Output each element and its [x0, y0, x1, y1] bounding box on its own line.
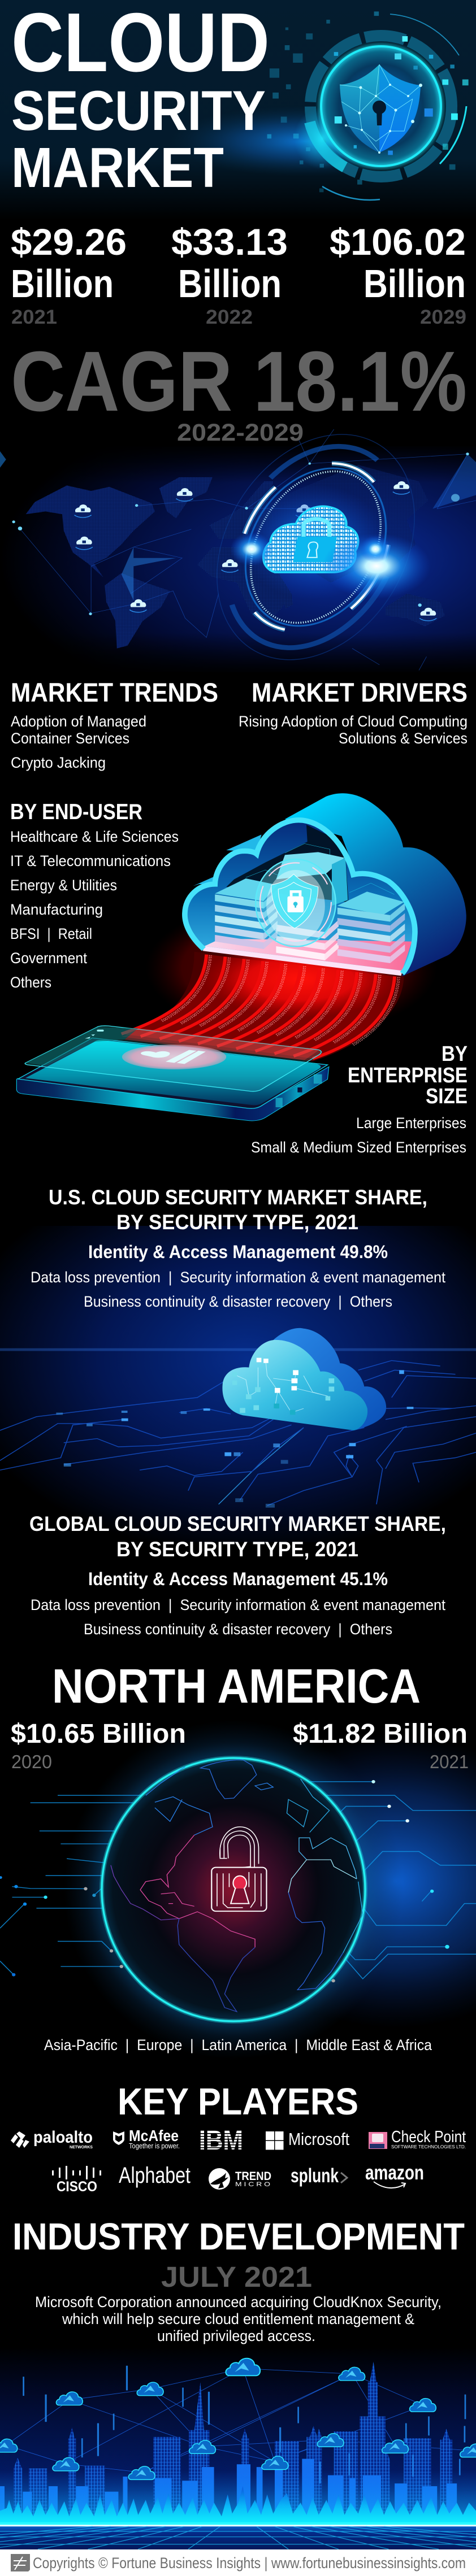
icon: ring around cloud lock	[179, 406, 452, 688]
market value stat 2029: $106.02	[330, 221, 466, 263]
red glow behind data stream: 11010101010110101010011001001100101001	[275, 968, 325, 1036]
icon: circuit padlock	[211, 1827, 266, 1911]
development description: unified privileged access.	[157, 2327, 315, 2344]
end-user list: Manufacturing	[10, 901, 103, 918]
icon: glowing circuit cloud	[222, 1328, 386, 1430]
red glow behind data stream: 11010101010110101010011001001100101001	[257, 966, 306, 1034]
global other segments	[31, 1596, 445, 1638]
logo: Trend Micro	[209, 2168, 271, 2190]
lens flare highlights	[230, 532, 431, 599]
global other segments: Business continuity & disaster recovery | Others	[84, 1621, 392, 1638]
global leading share: Identity & Access Management 45.1%	[88, 1569, 388, 1589]
global market share heading	[29, 1512, 446, 1561]
enterprise size list: Large Enterprises	[356, 1115, 466, 1132]
logo: IBM: IBM	[199, 2126, 243, 2156]
CAGR callout: 2022-2029	[177, 419, 304, 446]
network lines between clouds	[6, 2369, 470, 2473]
market trends list	[11, 713, 146, 771]
region heading: North America: NORTH AMERICA	[52, 1660, 421, 1713]
market value stat 2029	[330, 221, 466, 328]
market trends list: Crypto Jacking	[11, 754, 106, 771]
globe continents outline	[200, 1760, 257, 1799]
market value stat 2021: 2021	[11, 306, 57, 328]
U.S. other segments: Business continuity & disaster recovery | Others	[84, 1293, 392, 1310]
title: MARKET	[11, 136, 224, 199]
icon: Fortune Business Insights logo	[11, 2554, 30, 2571]
end-user list: Energy & Utilities	[10, 877, 117, 894]
by end-user heading: BY END-USER	[10, 800, 142, 824]
logo: Trend Micro: TREND	[235, 2170, 271, 2183]
development description: which will help secure cloud entitlement management &	[62, 2310, 414, 2327]
binary columns	[23, 2366, 466, 2483]
market drivers list: Solutions & Services	[339, 730, 468, 747]
icons: small cloud locks	[75, 504, 92, 517]
globe sphere	[102, 1758, 365, 2021]
illustration: phone with floating screen	[16, 1026, 329, 1121]
logo: Palo Alto	[11, 2128, 93, 2149]
market value stat 2022: $33.13	[171, 221, 288, 263]
circuit lines around globe	[0, 1782, 476, 1981]
illustration: 3D cloud with server stacks	[185, 793, 466, 976]
logo: Check Point	[369, 2128, 466, 2149]
stat: North America 2020: 2020	[11, 1751, 52, 1772]
icon: floating data squares	[267, 11, 469, 192]
panel: digital city skyline	[0, 2347, 476, 2549]
development description: Microsoft Corporation announced acquiring CloudKnox Security,	[35, 2294, 442, 2310]
U.S. leading share: Identity & Access Management 49.8%	[88, 1242, 388, 1262]
red glow behind data stream: 11010101010110101010011001001100101001	[161, 955, 212, 1022]
U.S. market share heading: BY SECURITY TYPE, 2021	[116, 1211, 358, 1234]
clouds on network	[56, 2392, 83, 2405]
floating glass panel	[25, 1026, 321, 1091]
end-user list: Healthcare & Life Sciences	[10, 828, 179, 845]
cloud front outline	[185, 820, 415, 973]
logo: Splunk: splunk	[291, 2165, 339, 2187]
global market share heading: BY SECURITY TYPE, 2021	[116, 1538, 358, 1561]
market trends list: Container Services	[11, 730, 129, 747]
market value stat 2029: 2029	[420, 306, 466, 328]
end-user list: Others	[10, 974, 51, 991]
phone screen	[25, 1040, 321, 1105]
logo: McAfee	[113, 2127, 180, 2150]
footer bar	[0, 2549, 476, 2576]
map: continents	[26, 465, 445, 649]
logo: Cisco: CISCO	[57, 2179, 97, 2195]
market value stat 2022	[171, 221, 288, 328]
logo: Trend Micro: M I C R O	[235, 2181, 271, 2188]
development description	[35, 2294, 442, 2344]
market trends heading: MARKET TRENDS	[11, 677, 218, 707]
stat: North America 2021	[293, 1719, 469, 1772]
key players heading: KEY PLAYERS	[118, 2081, 358, 2123]
market value stat 2022: Billion	[178, 262, 282, 306]
logo: McAfee: McAfee	[129, 2127, 179, 2144]
phone body	[16, 1067, 329, 1121]
by enterprise size heading: SIZE	[426, 1085, 468, 1108]
market value stat 2021: $29.26	[11, 221, 127, 263]
red glow behind data stream: 11010101010110101010011001001100101001	[180, 957, 231, 1025]
cloud extruded back	[285, 793, 466, 976]
market value stat 2021: Billion	[11, 262, 114, 306]
end-user list	[10, 828, 179, 991]
U.S. other segments	[31, 1269, 445, 1310]
stat: North America 2021: 2021	[430, 1751, 469, 1772]
U.S. market share heading: U.S. CLOUD SECURITY MARKET SHARE,	[49, 1186, 427, 1209]
back towers	[14, 2361, 452, 2527]
red glow behind data stream: 11010101010110101010011001001100101001	[332, 974, 382, 1043]
market value stat 2021	[11, 221, 127, 328]
market value stat 2022: 2022	[206, 306, 253, 328]
red glow behind data stream: 11010101010110101010011001001100101001	[199, 959, 250, 1027]
mid towers	[0, 2459, 457, 2526]
icon: shield lock in ring	[256, 859, 336, 947]
icon: cloud with padlock	[240, 484, 386, 599]
red glow behind data stream: 11010101010110101010011001001100101001	[218, 961, 269, 1029]
end-user list: IT & Telecommunications	[10, 852, 171, 869]
pink floor	[205, 939, 412, 971]
stat: North America 2021: $11.82 Billion	[293, 1719, 468, 1749]
red glow behind data stream: 11010101010110101010011001001100101001	[314, 973, 363, 1041]
panel: world map with cloud lock	[0, 406, 476, 688]
panel: circuit cloud backdrop	[0, 1226, 476, 1542]
market trends list: Adoption of Managed	[11, 713, 146, 730]
illustration: data stream from cloud to phone	[121, 928, 429, 1061]
panel: header banner	[0, 0, 476, 220]
other regions: Asia-Pacific | Europe | Latin America | Middle East & Africa	[44, 2037, 432, 2053]
market drivers list	[239, 713, 468, 747]
red glow behind data stream: 11010101010110101010011001001100101001	[352, 977, 400, 1046]
horizontal light streak	[0, 1348, 476, 1351]
red glow behind data stream: 11010101010110101010011001001100101001	[237, 964, 287, 1032]
stat: North America 2020: $10.65 Billion	[11, 1719, 186, 1749]
server stacks	[215, 852, 405, 963]
icon: security shield with rings	[294, 14, 466, 200]
by enterprise size heading	[348, 1042, 468, 1108]
by enterprise size heading: BY	[442, 1042, 468, 1066]
cloud front interior	[185, 820, 415, 973]
title	[11, 0, 270, 199]
enterprise size list	[251, 1115, 466, 1156]
global market share heading: GLOBAL CLOUD SECURITY MARKET SHARE,	[29, 1512, 446, 1535]
perspective grid floor	[0, 2526, 476, 2549]
panel: globe with lock	[0, 1720, 476, 2059]
logo: Palo Alto: NETWORKS	[70, 2146, 93, 2149]
global other segments: Data loss prevention | Security information & event management	[31, 1596, 445, 1613]
U.S. market share heading	[49, 1186, 427, 1234]
development date: JULY 2021	[161, 2261, 312, 2293]
front skyline	[0, 2486, 476, 2526]
logo: Palo Alto: paloalto	[33, 2128, 93, 2147]
logo: Microsoft: Microsoft	[288, 2129, 349, 2149]
title: SECURITY	[11, 79, 266, 142]
network lines	[20, 429, 476, 671]
logo: Alphabet: Alphabet	[119, 2163, 191, 2188]
red glow behind data stream: 11010101010110101010011001001100101001	[295, 971, 344, 1038]
binary stream bands	[122, 955, 395, 1059]
end-user list: Government	[10, 950, 87, 967]
logo: Amazon	[365, 2161, 424, 2188]
logo: Check Point: SOFTWARE TECHNOLOGIES LTD.	[391, 2144, 466, 2149]
logo: Microsoft	[266, 2129, 349, 2150]
logo: Cisco	[52, 2166, 101, 2195]
stat: North America 2020	[11, 1719, 186, 1772]
U.S. other segments: Data loss prevention | Security information & event management	[31, 1269, 445, 1286]
end-user list: BFSI | Retail	[10, 925, 92, 942]
red glow behind data stream	[121, 928, 429, 1061]
circuit traces	[0, 1360, 476, 1505]
profile disc	[122, 1045, 226, 1069]
logo: Amazon: amazon	[365, 2161, 424, 2184]
logo: McAfee: Together is power.	[129, 2142, 180, 2150]
